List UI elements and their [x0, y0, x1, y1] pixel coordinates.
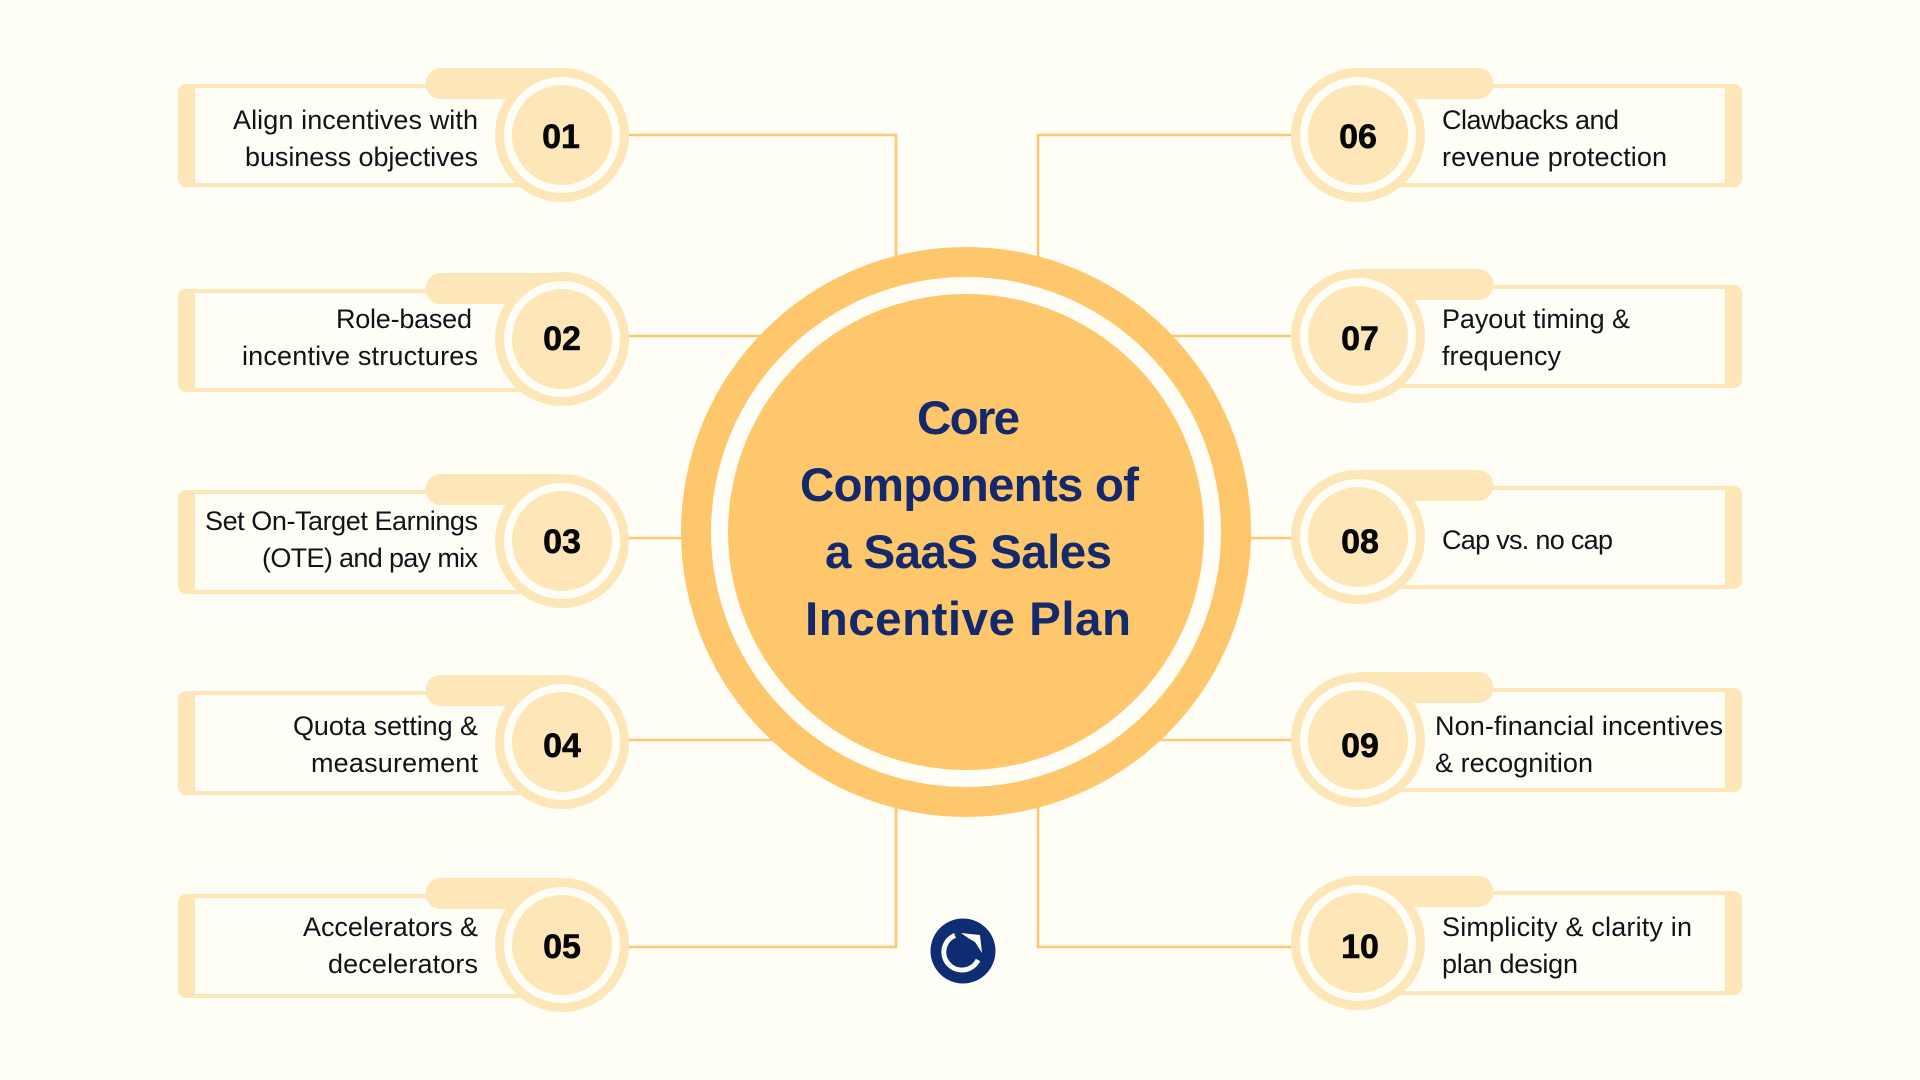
item 09: Non-financial incentives — [1435, 711, 1723, 741]
item 03: 03 — [543, 523, 581, 561]
item 04 — [178, 675, 629, 809]
item 06: Clawbacks and — [1442, 105, 1619, 135]
item 08: Cap vs. no cap — [1442, 525, 1613, 555]
title: Core — [917, 392, 1020, 445]
item 10 — [1291, 876, 1742, 1010]
item 06: revenue protection — [1442, 142, 1667, 172]
item 05: Accelerators & — [303, 912, 478, 942]
central circle with title — [681, 247, 1251, 817]
item 01: 01 — [542, 118, 580, 156]
item 09: & recognition — [1435, 748, 1593, 778]
icon: logo — [930, 918, 996, 984]
item 01 — [178, 68, 629, 202]
item 05: 05 — [543, 928, 581, 966]
item 03: Set On-Target Earnings — [205, 506, 478, 536]
item 09 — [1291, 672, 1742, 807]
item 10: plan design — [1442, 949, 1578, 979]
title: a SaaS Sales — [825, 526, 1112, 579]
item 07 — [1291, 269, 1742, 403]
item 01: business objectives — [245, 142, 478, 172]
item 10: Simplicity & clarity in — [1442, 912, 1692, 942]
item 04: Quota setting & — [293, 711, 478, 741]
item 10: 10 — [1341, 928, 1379, 966]
item 07: Payout timing & — [1442, 304, 1630, 334]
item 08: 08 — [1341, 523, 1379, 561]
item 04: measurement — [311, 748, 478, 778]
item 03: (OTE) and pay mix — [262, 543, 478, 573]
title: Components of — [800, 459, 1139, 512]
item 04: 04 — [543, 727, 581, 765]
item 06: 06 — [1339, 118, 1377, 156]
item 02: 02 — [543, 320, 581, 358]
item 05 — [178, 878, 629, 1012]
item 06 — [1291, 68, 1742, 202]
item 07: frequency — [1442, 341, 1562, 371]
item 02: incentive structures — [242, 341, 478, 371]
item 08 — [1291, 470, 1742, 604]
title: Incentive Plan — [805, 593, 1131, 646]
item 02 — [178, 272, 629, 406]
item 02: Role-based — [336, 304, 472, 334]
item 05: decelerators — [328, 949, 478, 979]
item 01: Align incentives with — [233, 105, 478, 135]
item 07: 07 — [1341, 320, 1379, 358]
item 09: 09 — [1341, 727, 1379, 765]
item 03 — [178, 474, 629, 608]
connector lines — [620, 135, 1300, 947]
